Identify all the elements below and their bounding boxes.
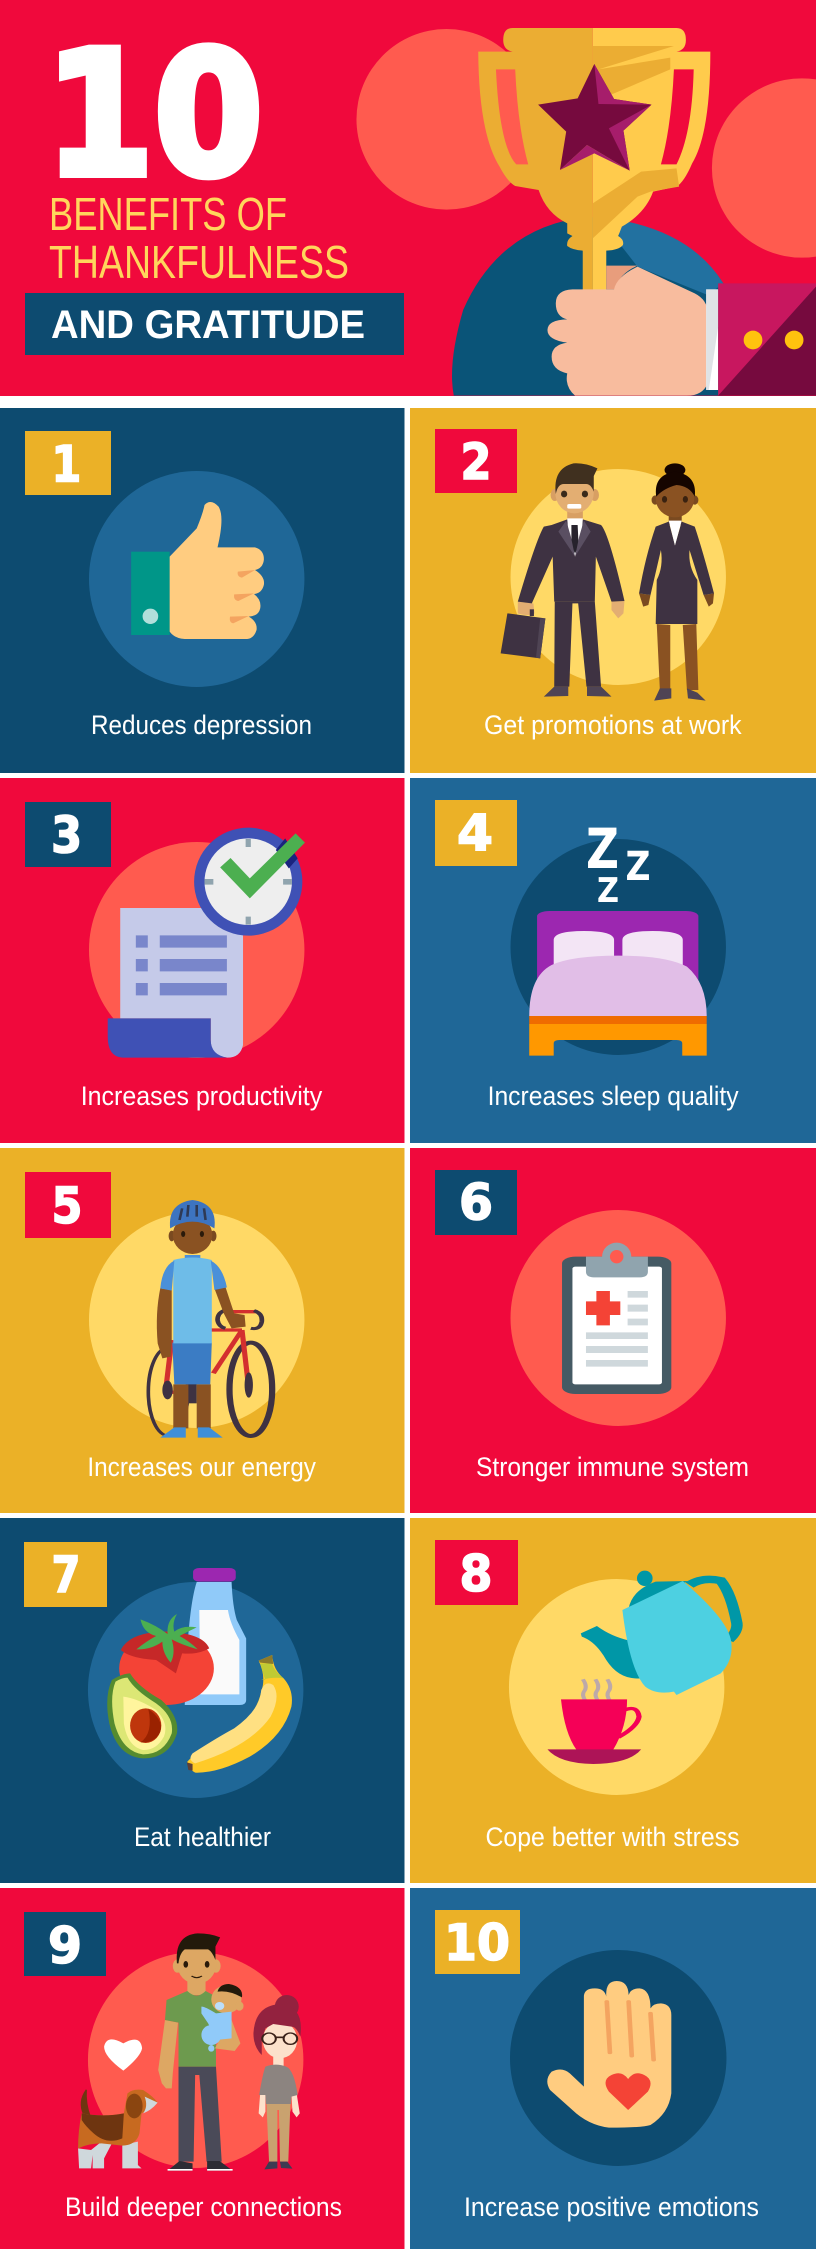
icon: cyclist with bicycle <box>89 1200 304 1438</box>
badge 8 <box>435 1540 518 1605</box>
badge 1: 1 <box>51 436 81 494</box>
icon: thumbs up <box>89 471 304 687</box>
icon: medical clipboard <box>511 1210 726 1426</box>
badge 5 <box>25 1172 111 1238</box>
label 10: Increase positive emotions <box>464 2192 759 2222</box>
banner: and gratitude: AND GRATITUDE <box>51 303 365 347</box>
badge 6 <box>435 1170 517 1235</box>
panel 2: get promotions at work <box>410 408 816 773</box>
badge 7 <box>24 1542 107 1607</box>
label 3: Increases productivity <box>81 1081 323 1111</box>
icon: sleep Z letters: Z <box>586 817 619 881</box>
badge 1 <box>25 431 111 495</box>
icon: hand with heart <box>510 1950 726 2166</box>
icon: bed <box>511 839 726 1056</box>
badge 7: 7 <box>52 1546 80 1604</box>
badge 2: 2 <box>460 433 492 491</box>
heading: benefits of: BENEFITS OF <box>49 188 287 240</box>
badge 9: 9 <box>48 1917 82 1975</box>
badge 10: 10 <box>444 1914 510 1972</box>
panel 10: increase positive emotions <box>410 1888 816 2249</box>
label 4: Increases sleep quality <box>488 1081 739 1111</box>
badge 4: 4 <box>457 804 493 862</box>
icon: business people <box>501 463 726 701</box>
badge 2 <box>435 429 517 493</box>
label 8: Cope better with stress <box>486 1822 740 1852</box>
panel 9: build deeper connections <box>0 1888 404 2249</box>
panel 6: stronger immune system <box>410 1148 816 1513</box>
big number 10: 10 <box>45 14 263 215</box>
icon: sleep Z letters: Z <box>597 871 619 911</box>
badge 9 <box>24 1912 106 1976</box>
panel 5: increases our energy <box>0 1148 404 1513</box>
header panel <box>0 0 816 396</box>
panel 3: increases productivity <box>0 778 404 1143</box>
panel 7: eat healthier <box>0 1518 404 1883</box>
header illustration: trophy and hand <box>356 28 816 396</box>
icon: sleep Z letters: Z <box>626 844 650 890</box>
panel 8: cope better with stress <box>410 1518 816 1883</box>
badge 3 <box>25 802 111 867</box>
label 2: Get promotions at work <box>484 710 742 740</box>
label 7: Eat healthier <box>134 1822 271 1852</box>
icon: checklist and clock <box>89 828 305 1058</box>
label 6: Stronger immune system <box>476 1452 749 1482</box>
icon: healthy food <box>88 1568 303 1798</box>
icon: teapot and cup <box>509 1571 737 1795</box>
icon: family and dog <box>78 1933 303 2171</box>
badge 6: 6 <box>459 1174 493 1232</box>
badge 3: 3 <box>51 806 82 864</box>
heading: thankfulness: THANKFULNESS <box>49 236 349 288</box>
panel 1: reduces depression <box>0 408 404 773</box>
banner: and gratitude <box>25 293 404 355</box>
label 5: Increases our energy <box>87 1452 317 1482</box>
label 1: Reduces depression <box>91 710 312 740</box>
label 9: Build deeper connections <box>65 2192 342 2222</box>
badge 5: 5 <box>52 1177 82 1235</box>
icon: sleep Z letters <box>586 817 650 911</box>
badge 4 <box>435 800 517 866</box>
badge 8: 8 <box>460 1545 492 1603</box>
panel 4: increases sleep quality <box>410 778 816 1143</box>
